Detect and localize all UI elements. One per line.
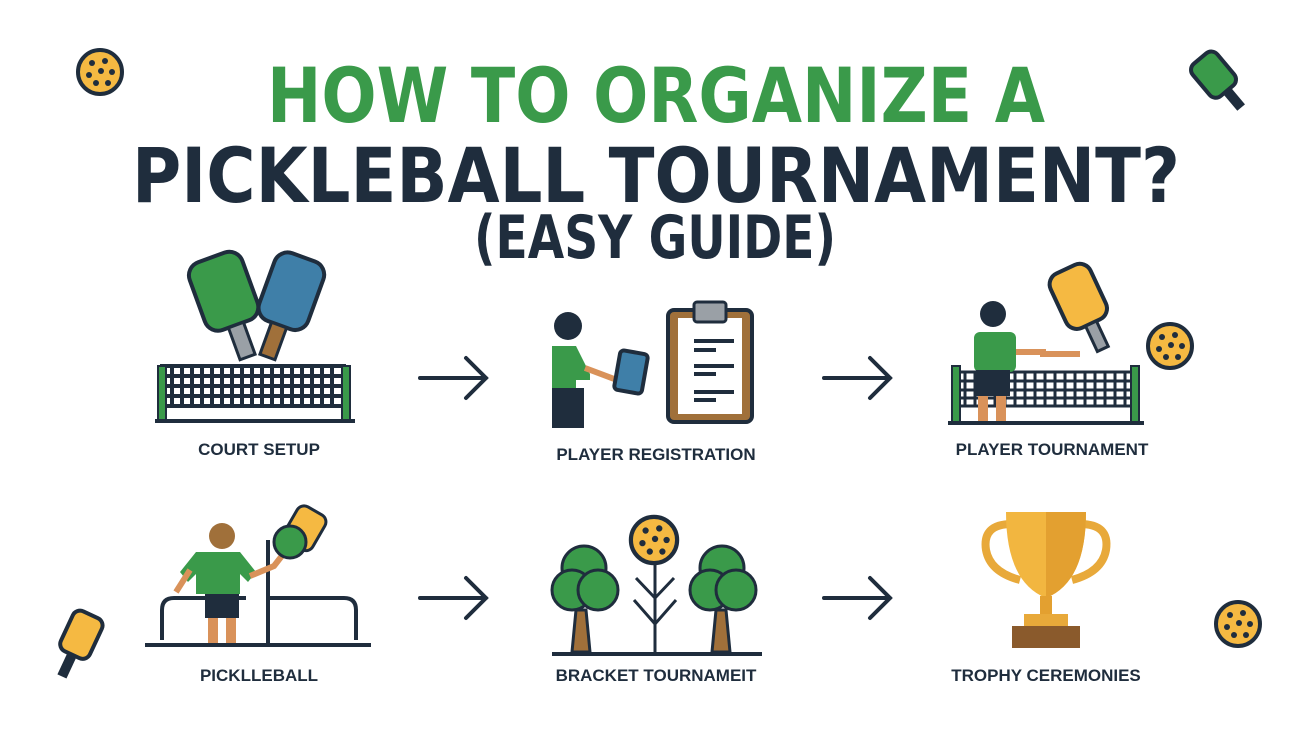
- label: PLAYER REGISTRATION: [556, 445, 756, 464]
- label: TROPHY CEREMONIES: [951, 666, 1141, 685]
- decoration: ball top-left: [78, 50, 122, 94]
- icon: player reaching paddle: [145, 503, 371, 647]
- icon: trophy: [986, 512, 1106, 648]
- step: bracket tournament: [552, 517, 762, 685]
- label: COURT SETUP: [198, 440, 320, 459]
- decoration: ball bottom-right: [1216, 602, 1260, 646]
- label: PICKLLEBALL: [200, 666, 318, 685]
- step: pickleball: [145, 503, 371, 685]
- step: player registration: [552, 302, 756, 464]
- icon: player at net with paddle and ball: [948, 260, 1192, 425]
- arrow 2: [824, 358, 890, 398]
- icon: trees and ball: [552, 517, 762, 656]
- decoration: paddle top-right: [1188, 48, 1253, 118]
- step: player tournament: [948, 260, 1192, 459]
- label: PLAYER TOURNAMENT: [956, 440, 1149, 459]
- step: trophy ceremonies: [951, 512, 1141, 685]
- title line 1: HOW TO ORGANIZE A: [267, 51, 1045, 140]
- step: court setup: [155, 248, 355, 459]
- label: BRACKET TOURNAMEIT: [556, 666, 757, 685]
- title line 3: (EASY GUIDE): [474, 203, 836, 273]
- arrow 4: [824, 578, 890, 618]
- decoration: paddle bottom-left: [47, 608, 105, 683]
- icon: paddles and net: [155, 248, 355, 423]
- arrow 3: [420, 578, 486, 618]
- title line 2: PICKLEBALL TOURNAMENT?: [132, 131, 1180, 220]
- arrow 1: [420, 358, 486, 398]
- icon: player with clipboard: [552, 302, 752, 428]
